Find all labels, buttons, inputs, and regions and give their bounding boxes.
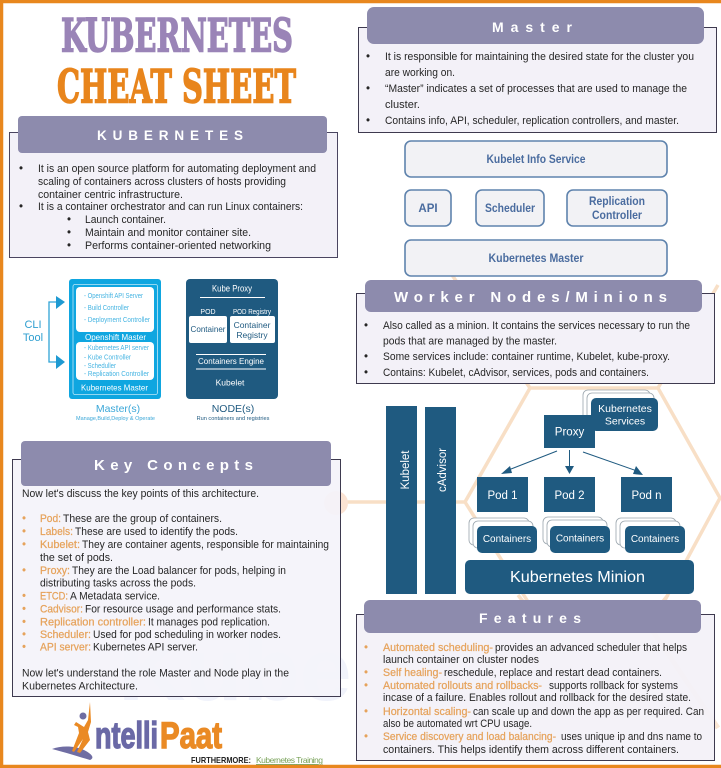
text block: features list: uses unique ip and dns name to [561,731,702,743]
text block: features list: supports rollback for systems [549,680,678,692]
text block: key concepts list: Now let's understand the role Master and Node play in the [22,668,289,680]
diagram: master components [405,141,667,276]
text block: master description: “Master” indicates a set of processes that are used to manage the [385,83,687,95]
panel: master(s): - Kube Controller [84,352,131,362]
heading: features [364,600,701,633]
text block: key concepts list: Kubernetes API server. [93,642,198,654]
box: kubelet info service: Kubelet Info Service [486,154,586,166]
text block: features list [364,642,704,756]
panel: worker nodes [356,280,714,384]
icon: CLI tool bracket with arrows [23,296,65,369]
text block: kubernetes description: scaling of containers across clusters of hosts providing [38,176,286,188]
box: replication controller: Replication [589,196,645,208]
heading: kubernetes [18,116,327,153]
box: containers 3: Containers [631,534,679,545]
box: containers 3 [616,518,685,553]
heading: features: Features [479,610,581,626]
text block: key concepts list: distributing tasks across the pods. [40,578,196,590]
text block: features list: • [364,706,368,718]
text block: features list: • [364,667,368,679]
text block: features list: Self healing- [383,667,442,679]
title: KUBERNETES [61,8,293,62]
panel: node(s): Container [190,324,226,334]
text block: features list: reschedule, replace and restart dead containers. [444,667,662,679]
text block: key concepts list: • [22,513,26,525]
background: hexagon network pattern [324,275,720,728]
icon: leaping figure [52,702,92,760]
text block: features list: • [364,731,368,743]
text block: features list: Horizontal scaling- [383,706,471,718]
text block: key concepts list: • [22,616,26,628]
text block: master description: • [366,51,370,63]
heading: key concepts: Key Concepts [94,457,253,474]
box: replication controller: Controller [592,210,642,222]
text block: kubernetes description: • [67,240,71,252]
text block: kubernetes description: • [67,214,71,226]
arrows: proxy to pods [501,450,643,475]
text block: master description: Contains info, API, scheduler, replication controllers, and master. [385,115,679,127]
text block: worker description: pods that are managed by the master. [383,336,557,348]
text block: features list: Service discovery and load balancing- [383,731,556,743]
text block: key concepts list: Pod: [40,513,61,525]
text block: kubernetes description: • [19,163,23,175]
box: kubernetes master: Kubernetes Master [488,253,584,265]
heading: master: Master [492,19,573,35]
box: containers 2 [543,517,610,553]
panel: node(s): Registry [236,330,268,340]
heading: key concepts [21,441,331,486]
panel: master(s): - Build Controller [84,303,129,312]
box: scheduler: Scheduler [485,203,535,215]
panel: node(s) [186,279,278,399]
text block: master description: • [366,83,370,95]
title: CHEAT SHEET [57,60,296,114]
heading: master [367,7,704,44]
text block: key concepts list: These are used to identify the pods. [75,526,238,538]
text block: worker description: Also called as a minion. It contains the services necessary to run the [383,320,690,332]
text block: worker description: Some services include: container runtime, Kubelet, kube-proxy. [383,351,670,363]
text block: key concepts list: • [22,565,26,577]
box: kubernetes minion [465,560,694,594]
text block: key concepts list: They are the Load balancer for pods, helping in [72,565,286,577]
label: node(s): Run containers and registries [197,416,270,422]
text block: kubernetes description: • [67,227,71,239]
panel: kubernetes [10,116,338,258]
panel: node(s): Container [234,320,271,330]
panel: master(s): - Scheduller [84,361,116,370]
logo: intellipaat [52,702,222,760]
box: containers 1 [469,518,537,553]
label: master(s) [76,403,155,422]
text block: worker description [364,320,690,379]
text block: worker description: • [364,351,368,363]
box: kubernetes services: Services [605,416,645,428]
box: proxy [544,415,595,448]
box: replication controller [567,190,667,226]
box: api [405,190,451,226]
label: master(s): Master(s) [96,403,140,415]
text block: key concepts list: It manages pod replication. [148,616,270,628]
panel: master(s): Openshift Master [85,332,146,342]
panel: master(s): - Kubernetes API server [84,343,149,352]
text block: key concepts list: Replication controller: [40,616,146,628]
icon: CLI tool bracket with arrows: Tool [23,332,43,344]
label: node(s) [197,403,270,422]
text block: key concepts list: Used for pod scheduling in worker nodes. [93,629,281,641]
text block: key concepts list: Proxy: [40,565,70,577]
bar: cadvisor [425,407,456,594]
panel: node(s): Kube Proxy [212,284,252,294]
panel: master(s): Kubernetes Master [81,382,148,392]
title [57,8,296,114]
panel: node(s): Kubelet [216,378,245,388]
text block: kubernetes description: container centric infrastructure. [38,189,183,201]
text block: key concepts list: Now let's discuss the key points of this architecture. [22,488,259,500]
heading: worker nodes [365,280,702,312]
icon: CLI tool bracket with arrows: CLI [24,319,42,331]
box: kubernetes master [405,240,667,276]
text block: key concepts list: • [22,629,26,641]
label: master(s): Manage,Build,Deploy & Operate [76,416,155,422]
text block: worker description: • [364,320,368,332]
box: proxy: Proxy [555,426,584,438]
panel: key concepts [12,441,340,696]
bar: kubelet: Kubelet [400,450,412,490]
text block: features list: launch container on cluster nodes [383,654,539,666]
text block: key concepts list: • [22,526,26,538]
link: furthermore: Kubernetes Training [256,755,323,765]
text block: key concepts list: Labels: [40,526,73,538]
box: containers 2: Containers [556,534,604,544]
bar: kubelet [386,406,417,594]
text block: key concepts list: Scheduler: [40,629,91,641]
panel: master(s): - Replication Controller [84,369,149,378]
diagram: kubernetes minion [386,390,694,594]
text block: master description: • [366,115,370,127]
box: kubernetes services: Kubernetes [598,403,652,415]
panel: master(s) [69,279,161,399]
bar: cadvisor: cAdvisor [437,448,449,492]
text block: key concepts list: ETCD: [40,590,68,602]
text block: key concepts list [22,488,329,692]
text block: key concepts list: Kubelet: [40,539,80,551]
box: pod 2 [544,477,595,512]
text block: master description: are working on. [385,67,455,79]
heading: worker nodes: Worker Nodes/Minions [394,289,667,306]
text block: key concepts list: API server: [40,642,91,654]
text block: features list: containers. This helps identify them across different containers. [383,744,679,756]
heading: kubernetes: KUBERNETES [97,128,243,143]
box: pod n [621,477,672,512]
panel: master(s): - Openshift API Server [84,291,143,300]
text block: worker description: • [364,367,368,379]
panel: features [356,600,714,760]
text block: kubernetes description [19,163,316,252]
text block: key concepts list: They are container agents, responsible for maintaining [82,539,329,551]
text block: kubernetes description: • [19,201,23,213]
panel: node(s): POD [200,309,216,316]
text block: key concepts list: A Metadata service. [70,590,160,602]
box: scheduler [476,190,544,226]
text block: kubernetes description: It is a container orchestrator and can run Linux containers: [38,201,303,213]
box: pod n: Pod n [631,490,662,502]
box: kubernetes minion: Kubernetes Minion [510,569,645,586]
text block: key concepts list: Kubernetes Architecture. [22,680,138,692]
box: pod 2: Pod 2 [554,490,585,502]
text block: key concepts list: • [22,590,26,602]
panel: master(s): - Deployment Controller [84,315,150,324]
text block: kubernetes description: It is an open source platform for automating deployment and [38,163,316,175]
text block: kubernetes description: Launch container. [85,214,166,226]
text block: key concepts list: These are the group of containers. [63,513,222,525]
logo: intellipaat: Paat [160,715,222,756]
text block: worker description: Contains: Kubelet, cAdvisor, services, pods and containers. [383,367,649,379]
architecture diagram [23,279,278,422]
box: kubelet info service [405,141,667,177]
text block: features list: also be automated wrt CPU usage. [383,718,532,730]
text block: key concepts list: For resource usage and performance stats. [85,604,281,616]
text block: features list: incase of a failure. Enables rollout and rollback for the desired state. [383,692,691,704]
text block: key concepts list: • [22,539,26,551]
text block: master description: cluster. [385,99,420,111]
background: faint watermark: Kuber [118,620,388,719]
box: api: API [418,203,438,215]
label: node(s): NODE(s) [212,403,254,415]
text block: kubernetes description: Maintain and monitor container site. [85,227,251,239]
link: furthermore: FURTHERMORE: [191,755,251,765]
text block: features list: provides an advanced scheduler that helps [495,642,687,654]
text block: features list: • [364,680,368,692]
panel: master [358,7,716,132]
text block: features list: Automated scheduling- [383,642,493,654]
text block: features list: Automated rollouts and rollbacks- [383,680,542,692]
box: pod 1: Pod 1 [487,490,518,502]
text block: master description: It is responsible for maintaining the desired state for the cluster you [385,51,694,63]
text block: master description [366,51,694,127]
text block: key concepts list: Cadvisor: [40,604,83,616]
text block: key concepts list: the set of pods. [40,552,113,564]
panel: node(s): POD Registry [233,309,271,316]
text block: key concepts list: • [22,642,26,654]
logo: intellipaat: ntelli [95,715,158,756]
text block: key concepts list: • [22,604,26,616]
box: pod 1 [477,477,528,512]
text block: kubernetes description: Performs container-oriented networking [85,240,271,252]
link: furthermore [191,755,323,765]
text block: features list: • [364,642,368,654]
panel: node(s): Containers Engine [198,356,264,366]
box: kubernetes services [583,390,658,431]
box: containers 1: Containers [483,534,531,545]
